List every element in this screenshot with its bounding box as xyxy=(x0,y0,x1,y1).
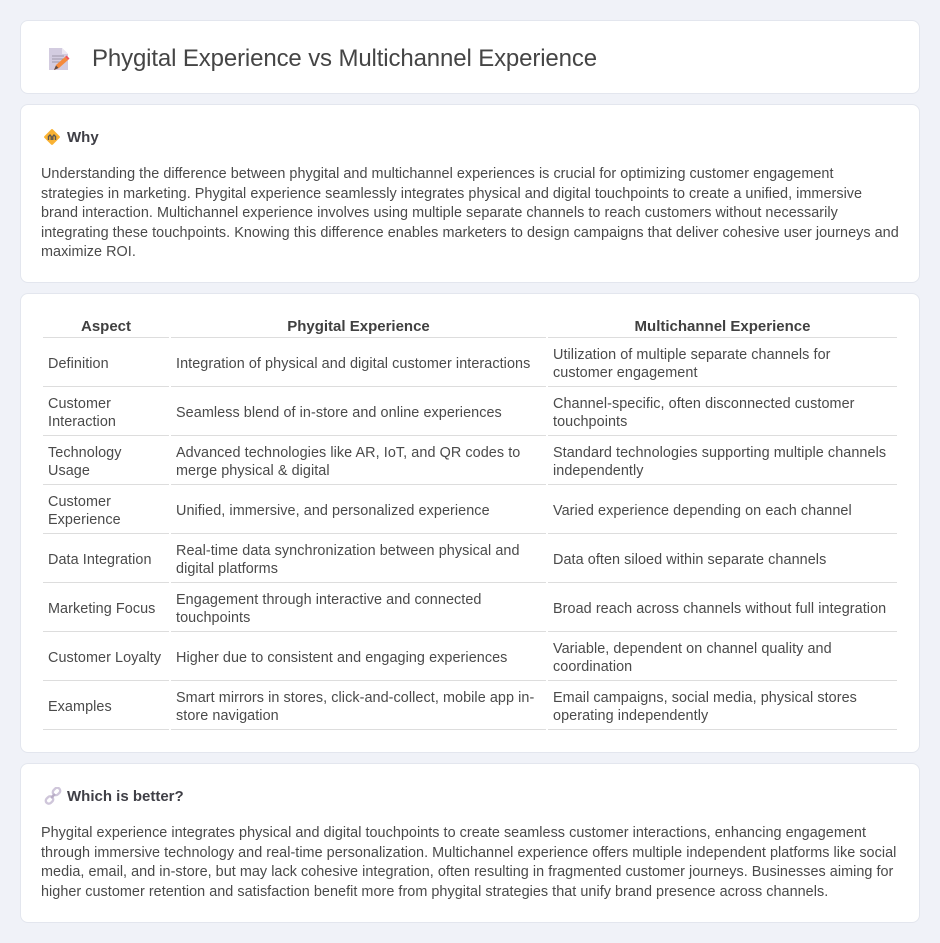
row: customer experience: Varied experience depending on each channel xyxy=(553,502,852,518)
panel: comparison table xyxy=(20,293,920,753)
row: customer interaction: Channel-specific, often disconnected customer xyxy=(553,396,855,412)
text block: why: brand interaction. Multichannel experience involves using multiple separate channels to reach customers without necessarily xyxy=(41,205,838,221)
row: data integration: digital platforms xyxy=(176,560,278,576)
row: examples: operating independently xyxy=(553,708,708,724)
text block: why: integrating these touchpoints. Knowing this difference enables marketers to design campaigns that deliver cohesive user journeys and xyxy=(41,225,899,241)
row: data integration: Real-time data synchronization between physical and xyxy=(176,542,520,558)
table header row xyxy=(43,318,897,338)
row: customer interaction: touchpoints xyxy=(553,414,627,430)
title: Phygital Experience vs Multichannel Experience xyxy=(92,45,597,72)
text block: which is better: Phygital experience integrates physical and digital touchpoints to create seamless customer interactions, enhancing engagement xyxy=(41,825,866,841)
row: customer interaction xyxy=(43,396,897,436)
row: definition: Integration of physical and digital customer interactions xyxy=(176,356,530,372)
text block: which is better: media, email, and in-store, but may lack cohesive integration, often resulting in fragmented customer journeys. Businesses aiming for xyxy=(41,864,893,880)
row: customer experience: Unified, immersive, and personalized experience xyxy=(176,502,490,518)
row: customer loyalty: Variable, dependent on channel quality and xyxy=(553,640,832,656)
row: technology usage: merge physical & digital xyxy=(176,462,330,478)
table header row: Multichannel Experience xyxy=(635,318,810,335)
row: customer loyalty: coordination xyxy=(553,658,632,674)
text block: why: strategies in marketing. Phygital experience seamlessly integrates physical and digital touchpoints to create a unified, immersive xyxy=(41,186,862,202)
row: customer experience: Customer xyxy=(48,494,111,510)
icon: chain link xyxy=(44,787,62,805)
row: technology usage: Standard technologies supporting multiple channels xyxy=(553,444,886,460)
row: definition xyxy=(43,346,897,387)
row: technology usage: Usage xyxy=(48,462,90,478)
row: marketing focus: Engagement through interactive and connected xyxy=(176,592,482,608)
row: marketing focus: touchpoints xyxy=(176,610,250,626)
table header row: Aspect xyxy=(81,318,131,335)
row: technology usage: Advanced technologies like AR, IoT, and QR codes to xyxy=(176,444,520,460)
heading: why: Why xyxy=(67,129,99,146)
row: customer loyalty: Customer Loyalty xyxy=(48,650,161,666)
row: marketing focus xyxy=(43,592,897,632)
row: examples: store navigation xyxy=(176,708,279,724)
row: customer interaction: Customer xyxy=(48,396,111,412)
row: customer interaction: Interaction xyxy=(48,414,116,430)
text block: why xyxy=(41,166,899,260)
row: data integration: Data often siloed within separate channels xyxy=(553,552,826,568)
row: customer experience: Experience xyxy=(48,512,121,528)
row: examples: Examples xyxy=(48,698,112,714)
icon: warning diamond xyxy=(44,129,60,145)
text block: which is better: through immersive technology and real-time personalization. Multichannel experience offers multiple independent platforms like social xyxy=(41,845,896,861)
row: technology usage: independently xyxy=(553,462,644,478)
row: customer experience xyxy=(43,494,897,534)
row: marketing focus: Broad reach across channels without full integration xyxy=(553,600,886,616)
row: examples xyxy=(43,690,897,730)
panel: why xyxy=(20,104,920,283)
heading: which is better: Which is better? xyxy=(67,788,184,805)
row: definition: Definition xyxy=(48,356,109,372)
row: examples: Email campaigns, social media, physical stores xyxy=(553,690,857,706)
panel: header xyxy=(20,20,920,94)
row: data integration xyxy=(43,542,897,583)
text block: why: Understanding the difference between phygital and multichannel experiences is crucial for optimizing customer engagement xyxy=(41,166,833,182)
table header row: Phygital Experience xyxy=(287,318,430,335)
row: technology usage: Technology xyxy=(48,444,122,460)
text block: why: maximize ROI. xyxy=(41,244,136,260)
row: customer loyalty xyxy=(43,640,897,681)
row: definition: Utilization of multiple separate channels for xyxy=(553,346,831,362)
row: customer loyalty: Higher due to consistent and engaging experiences xyxy=(176,650,507,666)
row: technology usage xyxy=(43,444,897,485)
row: customer interaction: Seamless blend of in-store and online experiences xyxy=(176,404,502,420)
icon: document with pencil xyxy=(49,48,70,70)
row: marketing focus: Marketing Focus xyxy=(48,600,155,616)
text block: which is better xyxy=(41,825,896,900)
row: data integration: Data Integration xyxy=(48,552,152,568)
row: examples: Smart mirrors in stores, click-and-collect, mobile app in- xyxy=(176,690,534,706)
text block: which is better: higher customer retention and satisfaction benefit more from phygital strategies that unify brand presence across channels. xyxy=(41,884,828,900)
row: definition: customer engagement xyxy=(553,364,698,380)
panel: which is better xyxy=(20,763,920,923)
